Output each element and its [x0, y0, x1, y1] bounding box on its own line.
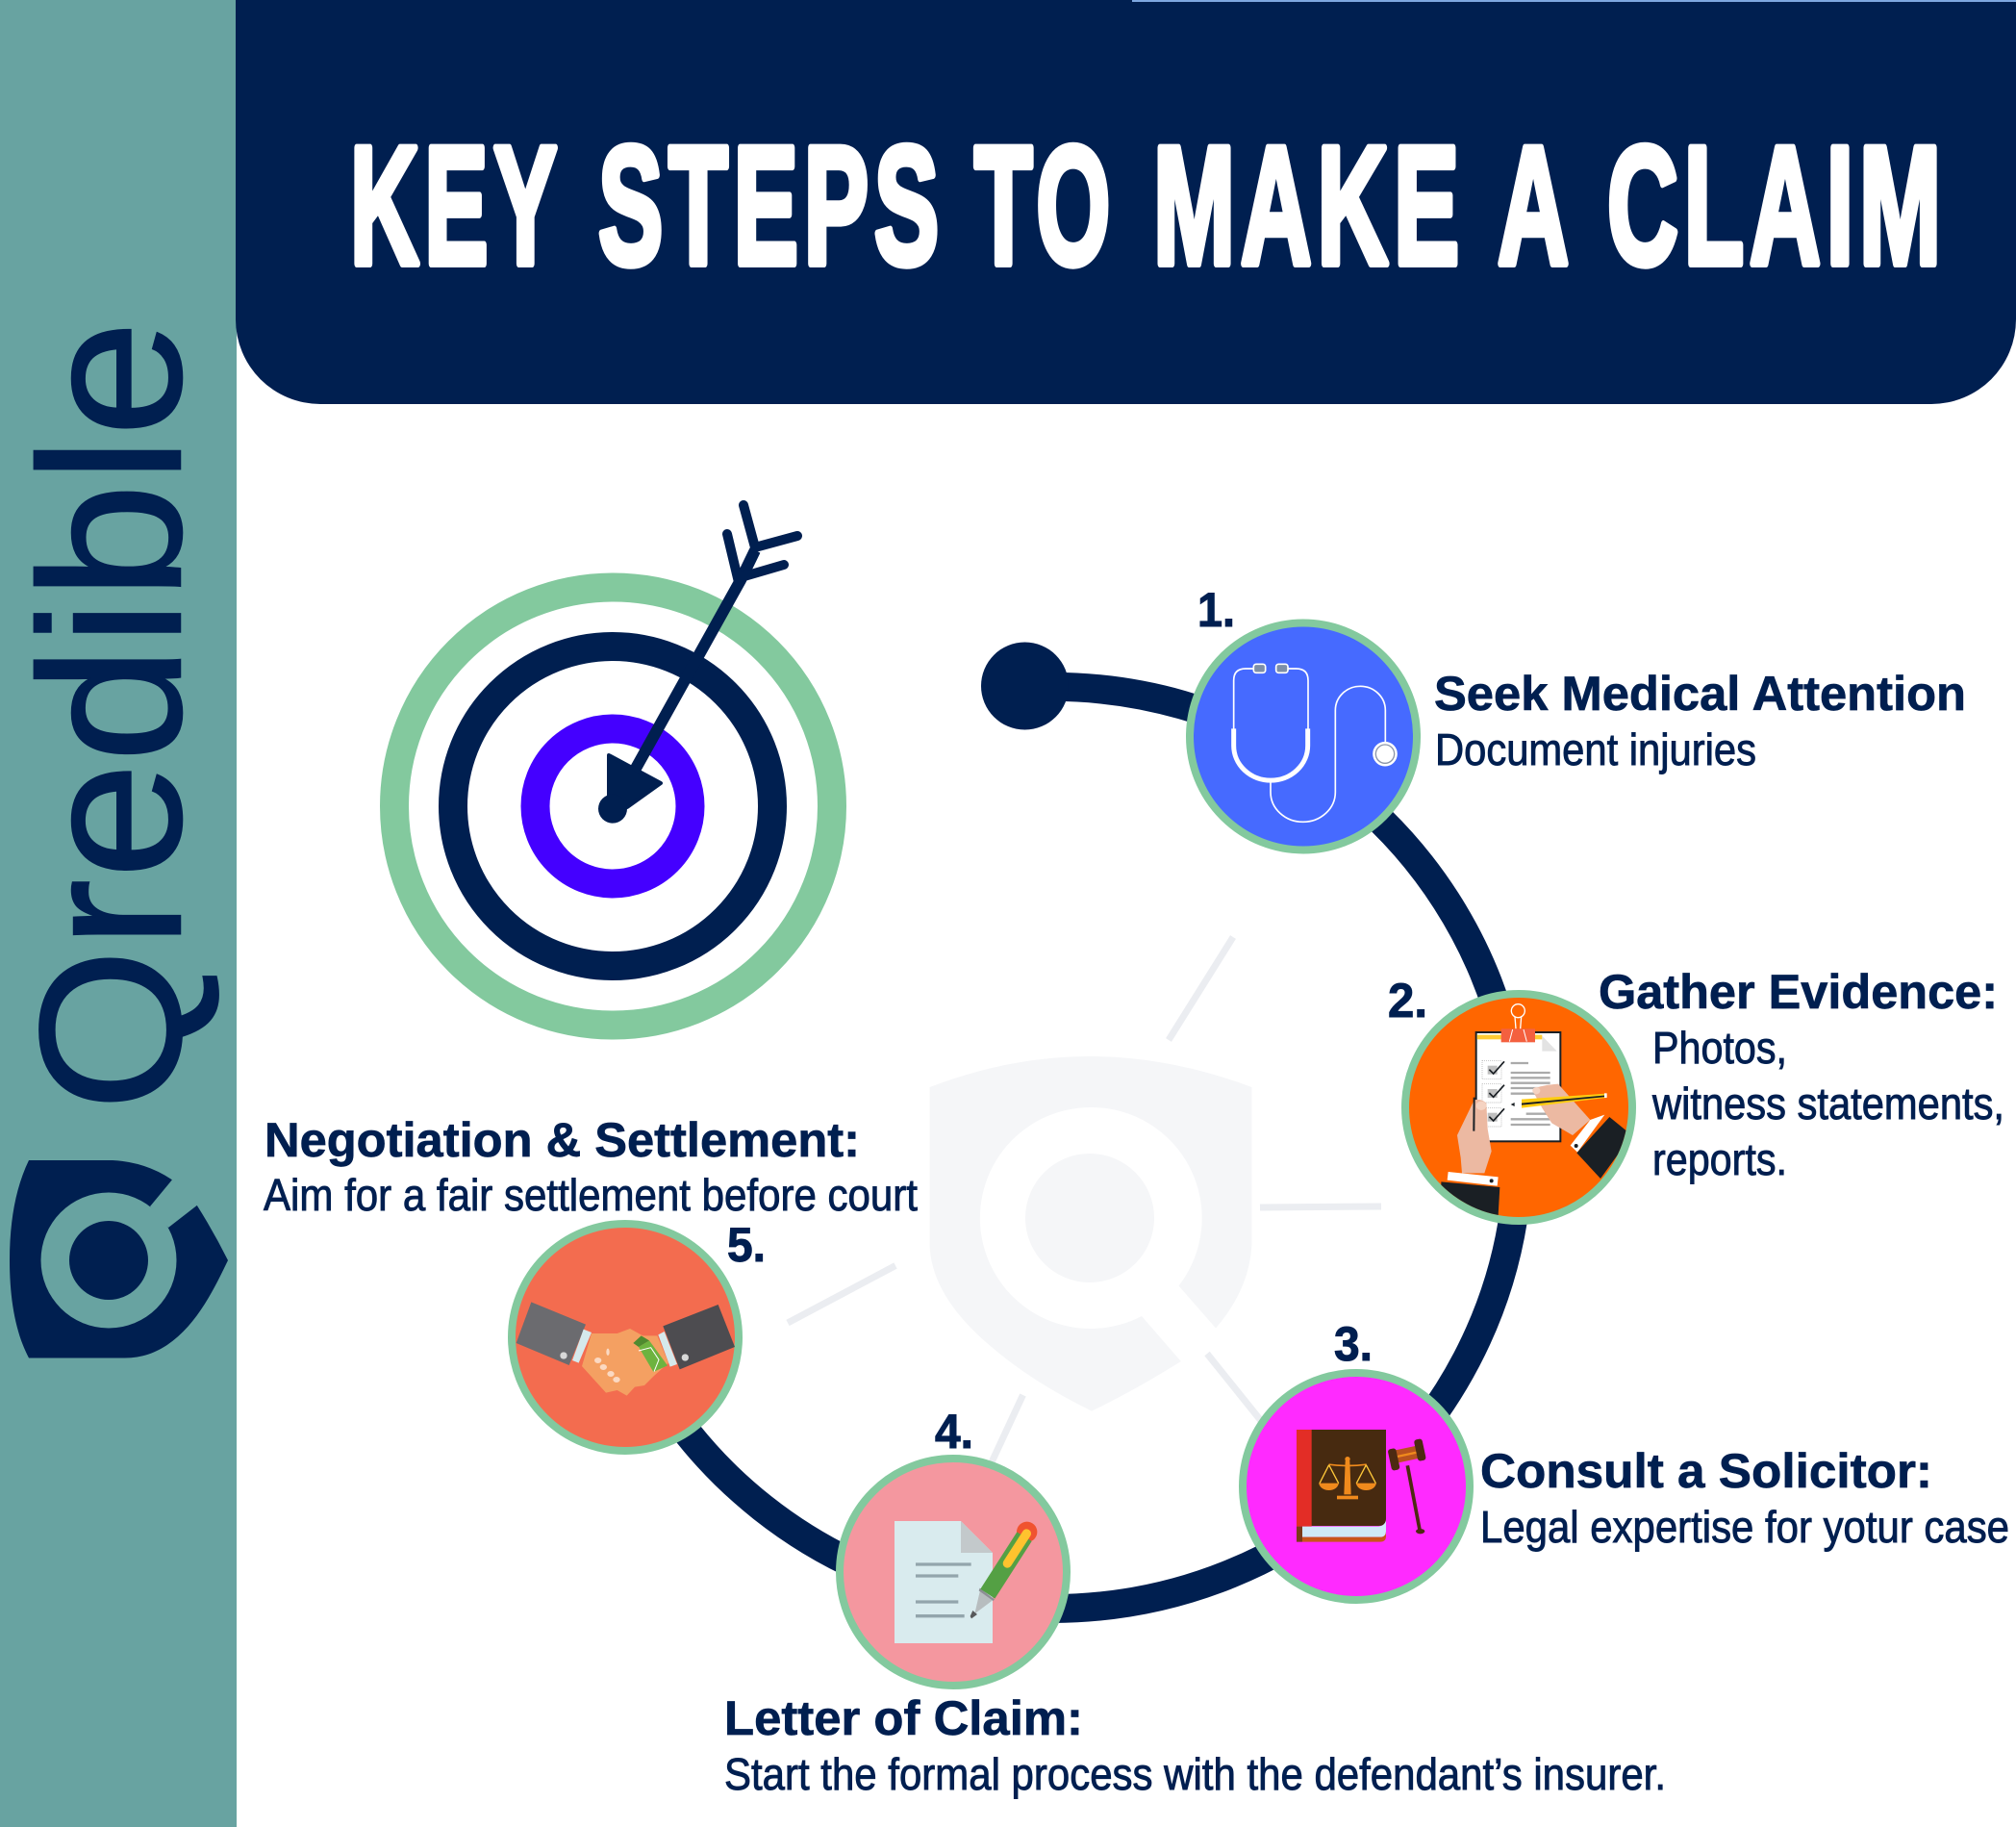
logo wordmark: Qredible	[0, 320, 223, 1111]
heading: Seek Medical Attention	[1434, 667, 1966, 721]
title: A	[1498, 113, 1575, 300]
description: Start the formal process with the defendant’s insurer.	[724, 1749, 1666, 1799]
target icon with arrow	[394, 505, 832, 1026]
step 1: seek medical attention	[1190, 583, 1966, 850]
description: Aim for a fair settlement before court	[264, 1170, 918, 1220]
heading: Letter of Claim:	[724, 1691, 1083, 1745]
title	[350, 113, 1947, 300]
description: Document injuries	[1435, 724, 1756, 774]
watermark: shield with rays	[788, 937, 1381, 1464]
step 4: letter of claim	[724, 1405, 1666, 1799]
icon: law book and gavel	[1297, 1430, 1427, 1542]
number 5: 5.	[727, 1218, 766, 1272]
heading: Negotiation & Settlement:	[265, 1113, 860, 1167]
icon: document and pen	[895, 1521, 1037, 1643]
icon: clipboard and hands	[1441, 1004, 1632, 1215]
number 4: 4.	[935, 1405, 973, 1459]
description	[1651, 1023, 2004, 1184]
step 3: consult a solicitor	[1243, 1317, 2009, 1600]
description: Photos,	[1652, 1023, 1787, 1073]
step 5: negotiation and settlement	[264, 1113, 918, 1451]
number 1: 1.	[1197, 583, 1235, 637]
title: KEY	[350, 113, 563, 300]
description: reports.	[1652, 1134, 1787, 1184]
number 3: 3.	[1334, 1317, 1373, 1371]
title: TO	[974, 113, 1116, 300]
icon: stethoscope	[1234, 664, 1397, 822]
sidebar brand panel	[0, 0, 237, 1827]
icon: handshake with money	[517, 1302, 735, 1396]
header banner	[236, 0, 2016, 404]
title: MAKE	[1153, 113, 1465, 300]
title: STEPS	[598, 113, 945, 300]
logo mark: shield with magnifier	[10, 1160, 228, 1358]
heading: Consult a Solicitor:	[1480, 1444, 1932, 1498]
heading: Gather Evidence:	[1599, 965, 1998, 1019]
step 2: gather evidence	[1388, 965, 2004, 1221]
process ring path	[658, 643, 1519, 1609]
number 2: 2.	[1388, 974, 1427, 1028]
arrow	[598, 505, 797, 824]
